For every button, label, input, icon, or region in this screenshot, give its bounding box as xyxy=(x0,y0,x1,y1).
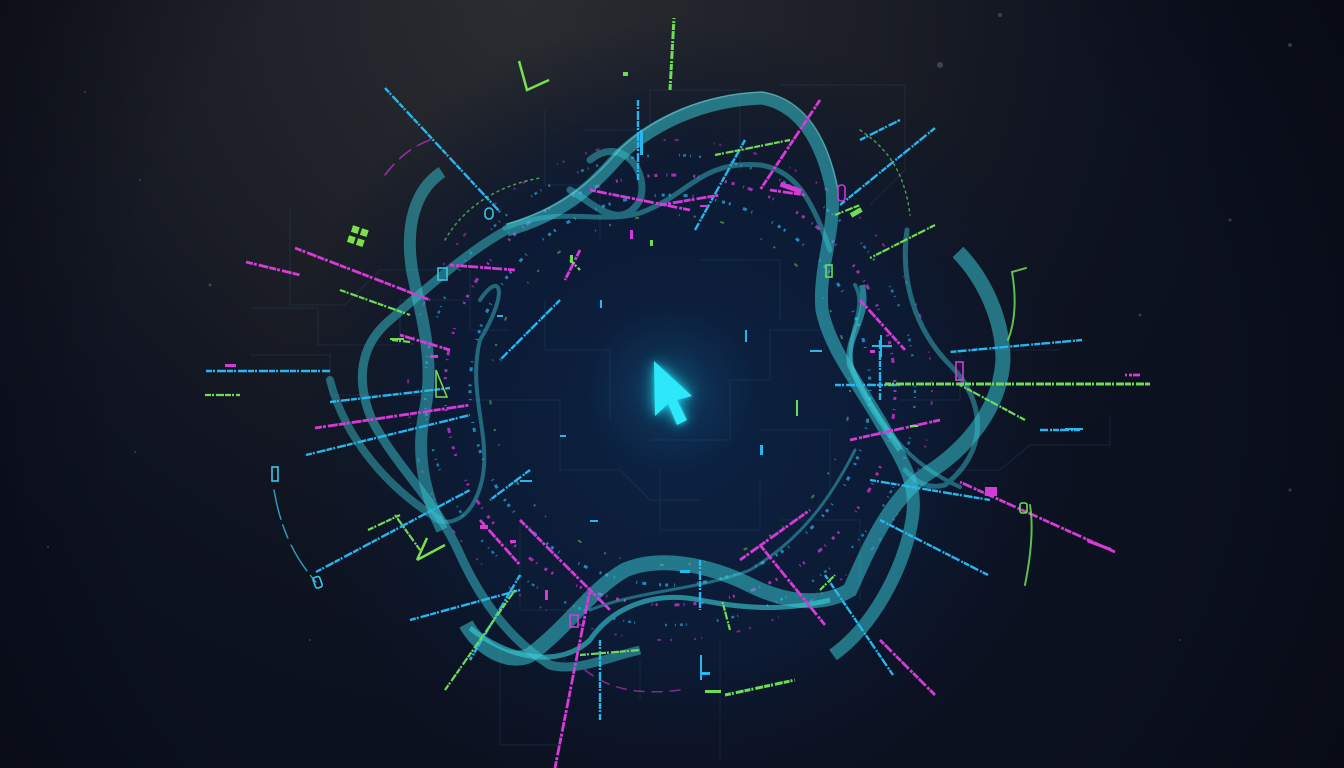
ribbon: left vertical xyxy=(410,172,442,530)
dense data ring xyxy=(408,140,932,640)
ribbons: main strands xyxy=(362,92,1003,667)
ribbon: wavy lower xyxy=(470,597,830,657)
ribbon: right loop xyxy=(466,252,1003,658)
ribbon: top arc xyxy=(507,92,913,655)
halo behind cursor xyxy=(570,290,770,490)
icon: glowing arrow cursor xyxy=(654,361,692,425)
background dust particles xyxy=(47,13,1292,641)
green angle marks xyxy=(417,61,549,560)
ribbons: back strands xyxy=(330,151,978,610)
ribbon: left loop xyxy=(362,230,640,667)
scattered data bits xyxy=(225,72,1112,693)
ribbon: inner right xyxy=(849,285,900,450)
icon: green square cluster xyxy=(347,225,369,247)
circuit board traces xyxy=(250,85,1110,760)
small outlined glyph nodes xyxy=(272,185,1027,627)
broken arcs xyxy=(274,130,1032,692)
radial data streaks: cyan xyxy=(206,88,1082,720)
radial data streaks: magenta xyxy=(246,100,1140,768)
radial data streaks: green xyxy=(205,18,1150,695)
